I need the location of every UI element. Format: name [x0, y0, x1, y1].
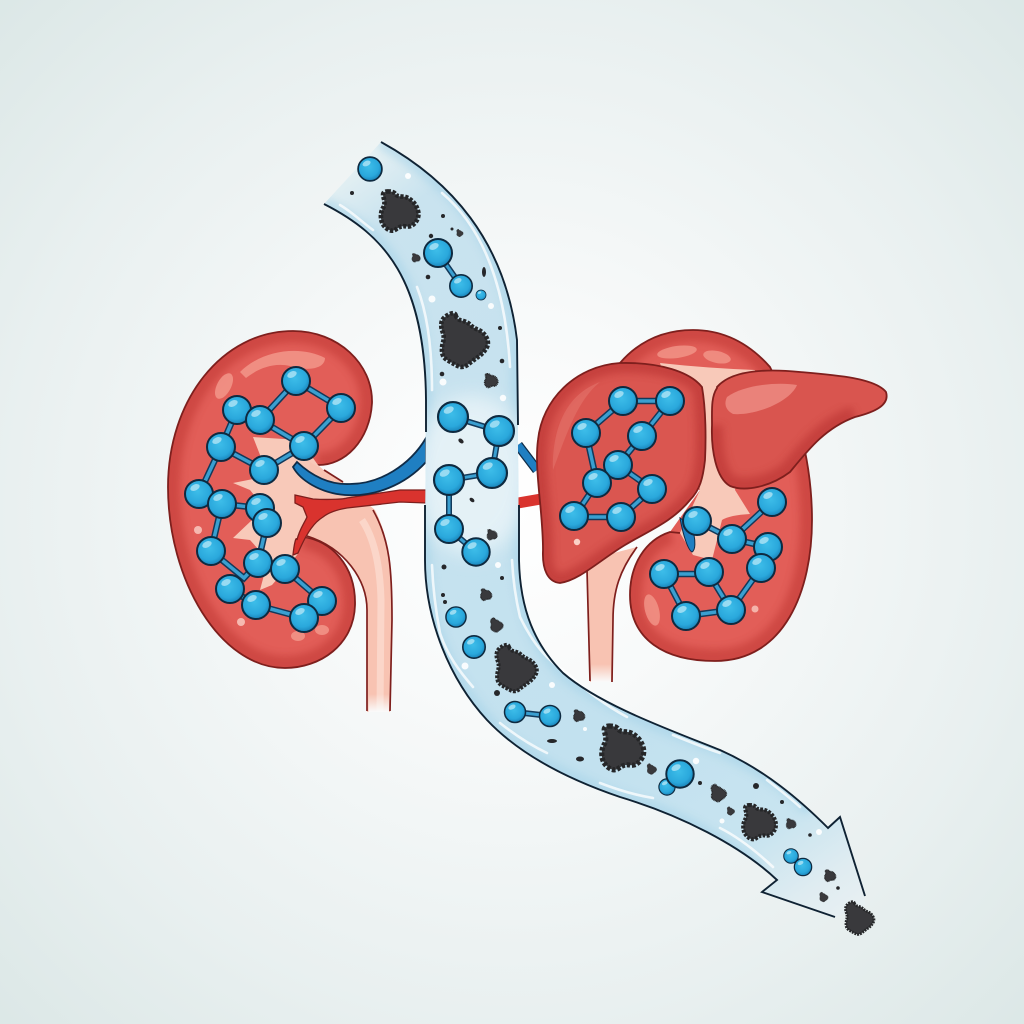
stream molecules [358, 157, 812, 876]
small debris dots [350, 191, 840, 890]
stream lower outline [324, 204, 835, 917]
right kidney highlights [641, 343, 758, 627]
bond highlights [574, 401, 670, 517]
atoms [358, 157, 812, 876]
right kidney vein stub [518, 445, 537, 470]
right kidney molecule [650, 488, 786, 630]
left kidney rim shading [168, 331, 372, 668]
left kidney vein [293, 438, 426, 495]
bond highlights [438, 253, 803, 866]
stream fill [324, 142, 866, 917]
bonds [574, 401, 670, 517]
left lobe highlight [553, 382, 600, 470]
left ureter fade [368, 694, 389, 712]
atoms [560, 387, 684, 531]
atoms [650, 488, 786, 630]
stream light edges [340, 193, 800, 867]
atoms [185, 367, 355, 632]
right kidney vein stub fill [518, 445, 537, 470]
right ureter [587, 547, 637, 682]
stream upper outline [381, 142, 865, 896]
liver molecule [560, 387, 684, 531]
right kidney rim shading [620, 330, 812, 661]
left ureter [307, 462, 392, 712]
bond highlights [664, 502, 772, 616]
bonds [664, 502, 772, 616]
right lobe shading [712, 417, 855, 488]
left lobe shading [537, 363, 706, 583]
bubbles [405, 173, 822, 835]
right kidney artery stub [518, 499, 541, 503]
left lobe outline [537, 363, 706, 583]
left kidney molecule [185, 367, 355, 632]
left ureter highlight [362, 520, 381, 712]
left kidney [168, 331, 426, 712]
toxin particles [350, 173, 874, 934]
left kidney pelvis [233, 437, 345, 590]
liver highlight [725, 384, 797, 414]
right kidney outline [620, 330, 812, 661]
stream edge tint [324, 142, 810, 870]
right kidney [518, 330, 812, 682]
left kidney body [168, 331, 372, 668]
bonds [438, 253, 803, 866]
stream arrow [324, 142, 866, 917]
bond highlights [199, 381, 341, 618]
liver spot [574, 539, 580, 545]
left kidney artery [293, 490, 426, 555]
right ureter fade [591, 664, 611, 682]
right ureter outline [587, 547, 637, 682]
liver [537, 363, 887, 583]
bonds [199, 381, 341, 618]
right kidney pelvis [660, 363, 755, 560]
left ureter outline [307, 470, 392, 711]
right kidney body [610, 330, 812, 661]
left kidney outline [168, 331, 372, 668]
liver right lobe [712, 371, 887, 488]
stream pale centre [425, 390, 518, 558]
liver left lobe [537, 363, 706, 583]
left kidney highlights [194, 351, 329, 641]
right lobe outline [712, 371, 887, 488]
small blue vessel [680, 518, 695, 552]
